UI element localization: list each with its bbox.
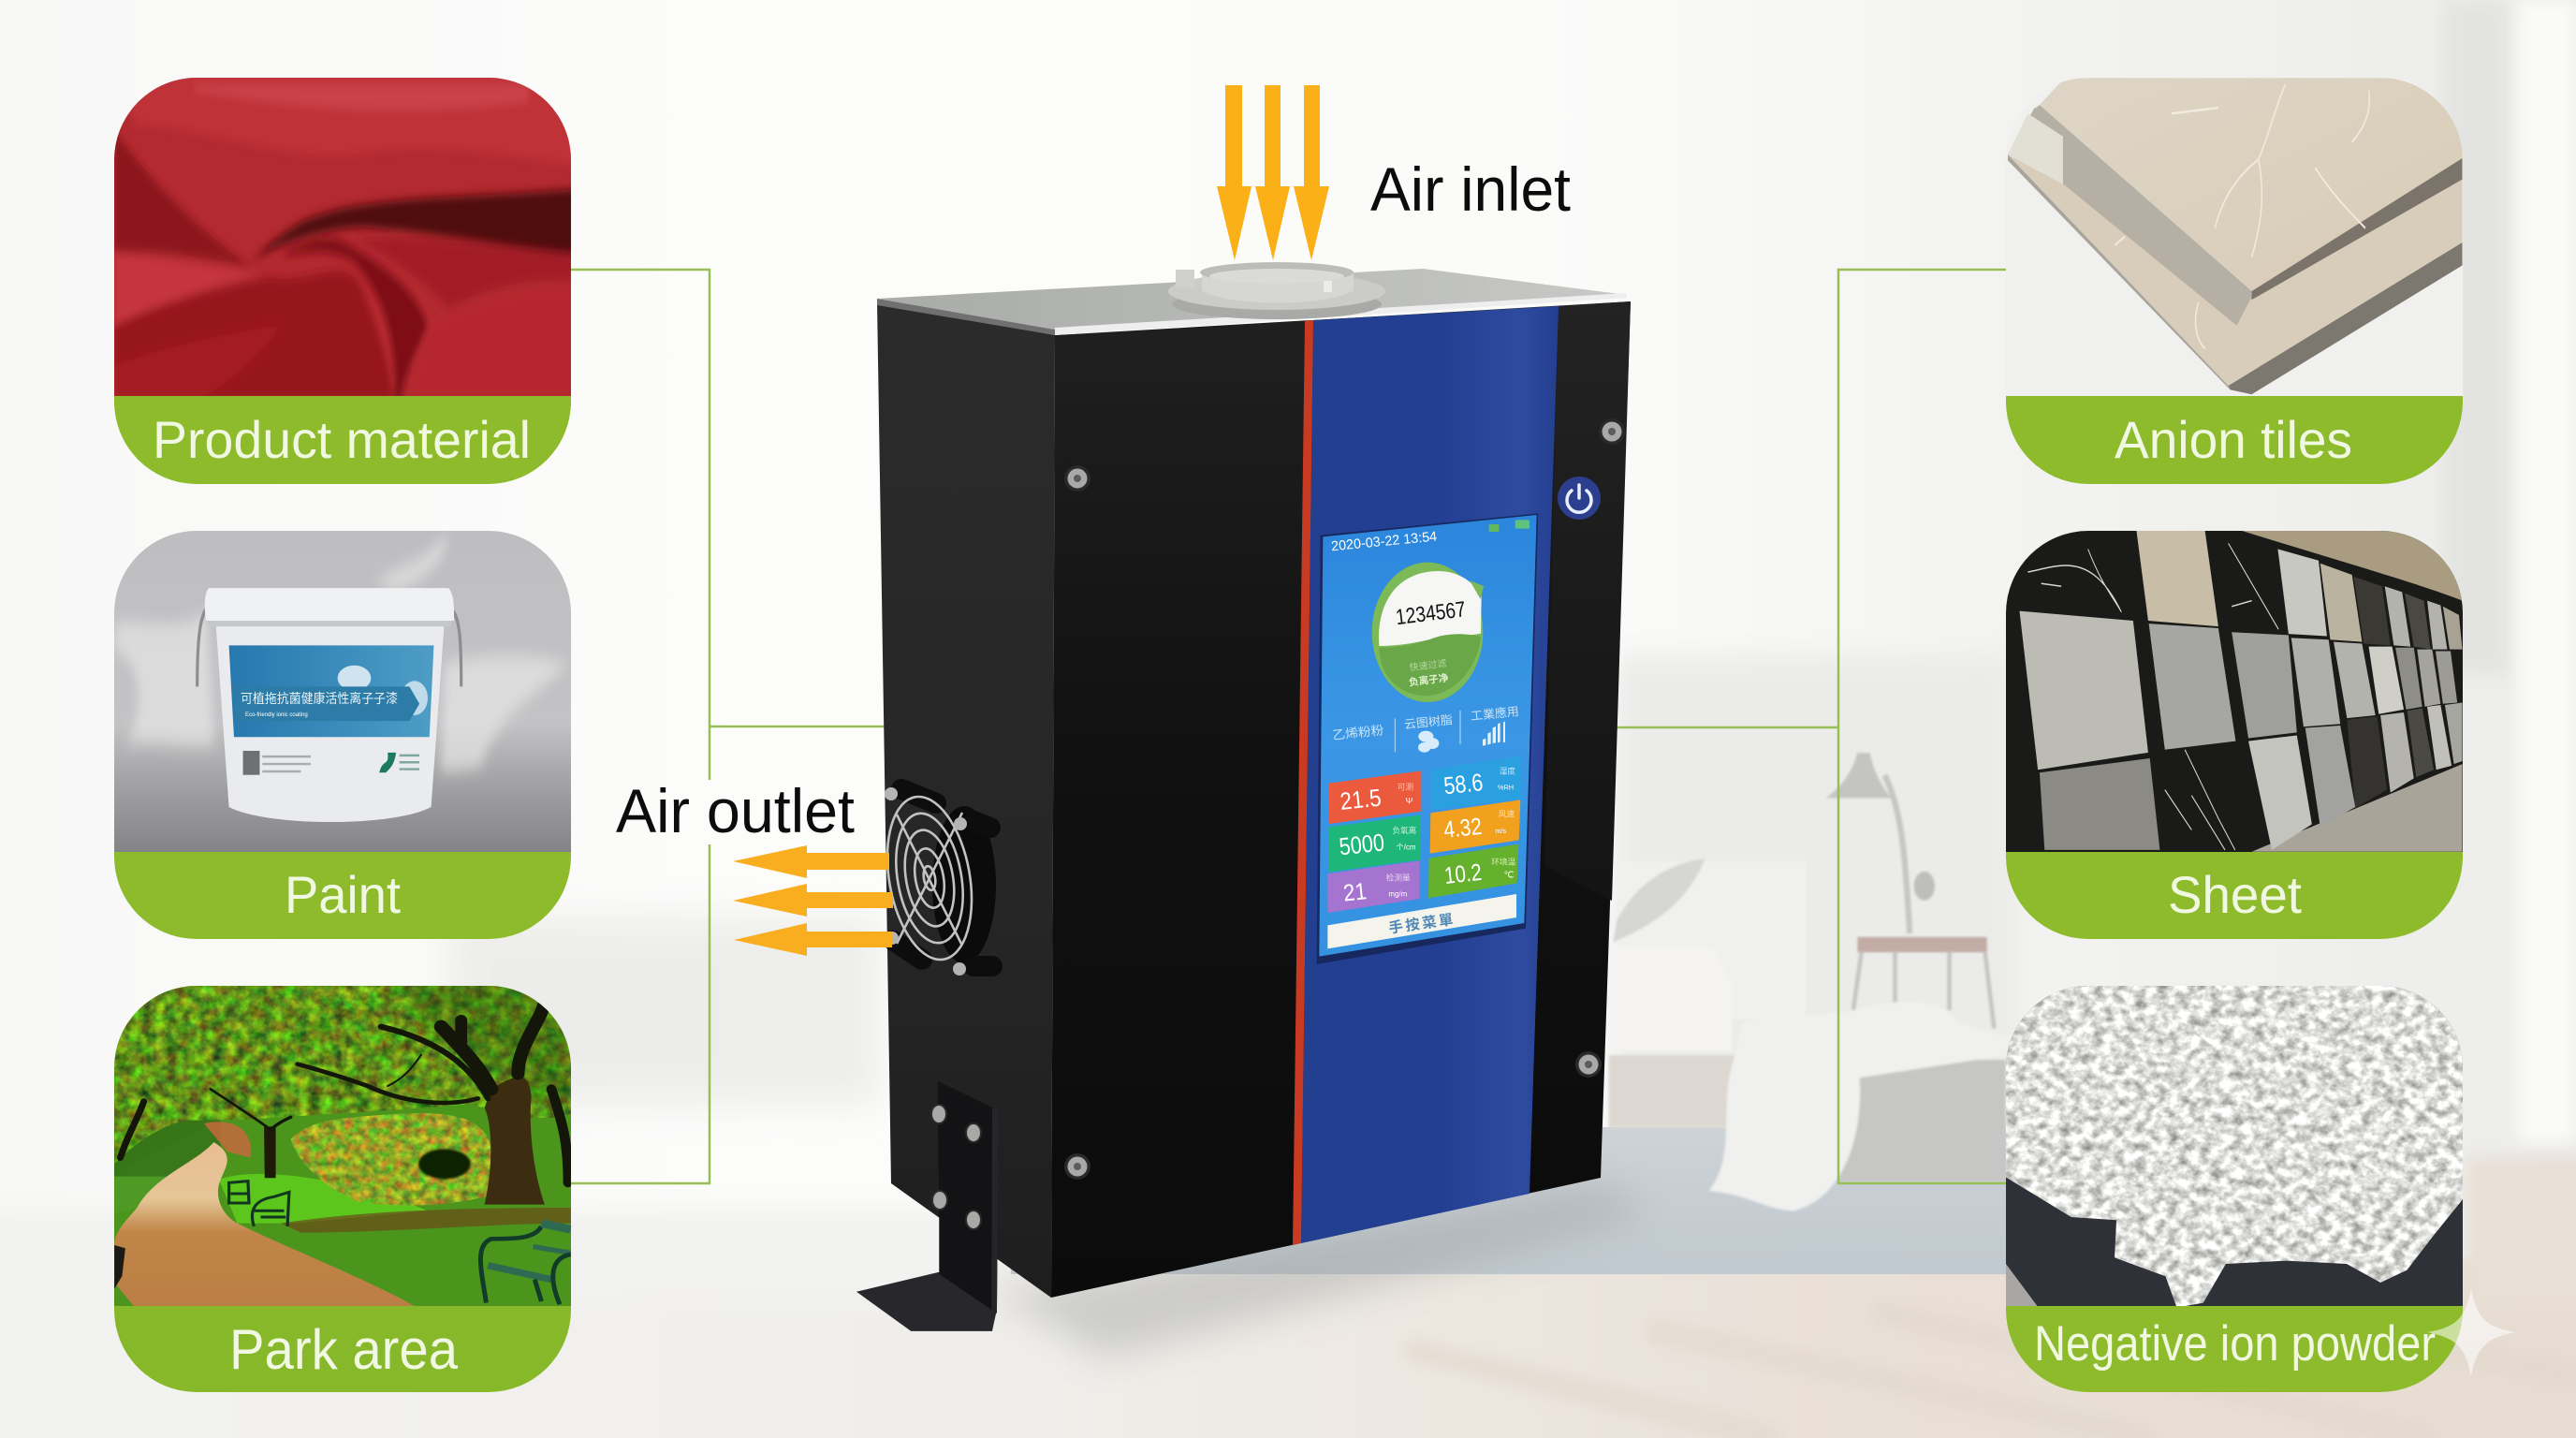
- sensor tile: red: [1329, 770, 1421, 824]
- sensor tile: purple: 检测量: [1386, 873, 1411, 883]
- status labels: [1332, 704, 1519, 753]
- sofa, table, lamp and blanket: [1609, 753, 2010, 1211]
- sensor tile: red: 可测: [1398, 782, 1413, 791]
- sensor tile: orange: m/s: [1495, 827, 1506, 835]
- caption bar: [114, 1306, 571, 1392]
- air quality gauge: 快速过滤: [1409, 657, 1447, 673]
- action button: [1327, 894, 1516, 948]
- air quality gauge: [1372, 563, 1484, 702]
- panel: paint: [114, 531, 571, 939]
- caption: Product material: [153, 410, 531, 469]
- sensor tile: lime: 10.2: [1443, 859, 1483, 889]
- image: paint bucket with smoke: Eco-friendly ionic coating: [245, 712, 308, 718]
- sensor tile: lime: 环境温: [1491, 856, 1516, 866]
- panel: anion tiles: [1998, 67, 2472, 484]
- sensor tile: orange: [1430, 800, 1520, 854]
- image: red fabric: [107, 67, 575, 405]
- connector lines: right: [1615, 270, 2006, 1183]
- air inlet collar: [1168, 262, 1385, 319]
- caption: Paint: [285, 865, 401, 924]
- label: air inlet: Air inlet: [1370, 154, 1571, 224]
- front panel: [1051, 301, 1631, 1298]
- caption bar: [114, 396, 571, 484]
- sensor tile: green: 负氧离: [1392, 825, 1417, 835]
- image: park with trees and benches: [107, 980, 575, 1311]
- blue panel: [1301, 306, 1559, 1243]
- exhaust fan: [875, 787, 996, 976]
- caption: Sheet: [2168, 865, 2302, 924]
- sensor tile: lime: [1428, 844, 1518, 898]
- panel: park area: [107, 980, 575, 1392]
- panel: negative ion powder: [1999, 980, 2471, 1392]
- connector lines: left: [571, 270, 889, 1183]
- park benches: [229, 1181, 289, 1226]
- air quality gauge: 负离子净: [1408, 671, 1450, 689]
- sensor tile: green: 个/cm: [1397, 843, 1416, 851]
- sensor tile: orange: 风速: [1499, 810, 1515, 819]
- power button: [1558, 477, 1601, 520]
- caption bar: [2006, 396, 2463, 484]
- mounting bracket: [856, 1081, 999, 1331]
- sensor tile: green: 5000: [1338, 828, 1385, 860]
- image: white powder pile on dark surface: [1999, 980, 2471, 1311]
- sensor tile: green: [1328, 815, 1420, 873]
- sparkle watermark: [2427, 1288, 2515, 1376]
- date and status: 2020-03-22 13:54: [1331, 530, 1438, 554]
- status labels: 工業應用: [1470, 704, 1519, 723]
- bucket label: [229, 645, 433, 737]
- sensor tile: blue: [1431, 756, 1522, 810]
- image: wall of stone sheets in perspective: [1998, 521, 2472, 858]
- caption: Negative ion powder: [2034, 1316, 2436, 1372]
- caption: Park area: [229, 1318, 459, 1381]
- sensor tile: red: 21.5: [1339, 784, 1383, 815]
- action button: 手按菜單: [1387, 911, 1456, 937]
- device cabinet: [856, 262, 1631, 1331]
- fan screws: [885, 787, 967, 976]
- caption bar: [2006, 852, 2463, 939]
- sensor tile: purple: mg/m: [1388, 889, 1408, 898]
- sensor tile: red: Ψ: [1406, 796, 1413, 805]
- sensor tile: purple: 21: [1342, 878, 1368, 907]
- sensor tile: purple: [1327, 860, 1420, 913]
- touch screen: [1317, 513, 1538, 964]
- shadow under cabinet: [992, 1181, 1647, 1357]
- air quality gauge: 1234567: [1395, 596, 1467, 629]
- caption bar: [114, 852, 571, 939]
- top plate: [877, 269, 1627, 330]
- side panel: [877, 301, 1055, 1298]
- sensor tile: blue: 58.6: [1442, 768, 1485, 800]
- status labels: 云图树脂: [1404, 713, 1454, 731]
- sensor tile: blue: %RH: [1498, 783, 1514, 791]
- image: paint bucket with smoke: [114, 531, 571, 852]
- sensor tile: lime: ℃: [1504, 870, 1514, 879]
- arrows: air outlet: [733, 845, 893, 956]
- sensor tile: orange: 4.32: [1442, 814, 1483, 844]
- red stripe: [1293, 320, 1313, 1245]
- panel: product material: [107, 67, 575, 484]
- panel: sheet: [1998, 521, 2472, 939]
- sensor tile: blue: 湿度: [1500, 766, 1515, 776]
- image: stacked marble tile slabs: [1998, 67, 2472, 405]
- arrows: air inlet: [1217, 85, 1329, 260]
- status labels: 乙烯粉粉: [1332, 723, 1384, 742]
- label: air outlet: Air outlet: [616, 776, 855, 845]
- caption: Anion tiles: [2115, 410, 2352, 469]
- bracket screws: [931, 1105, 981, 1229]
- corner screws: [1064, 418, 1625, 1180]
- fan guard: [875, 790, 984, 966]
- caption bar: [2006, 1306, 2463, 1392]
- image: paint bucket with smoke: 可植拖抗菌健康活性离子子漆: [241, 691, 398, 706]
